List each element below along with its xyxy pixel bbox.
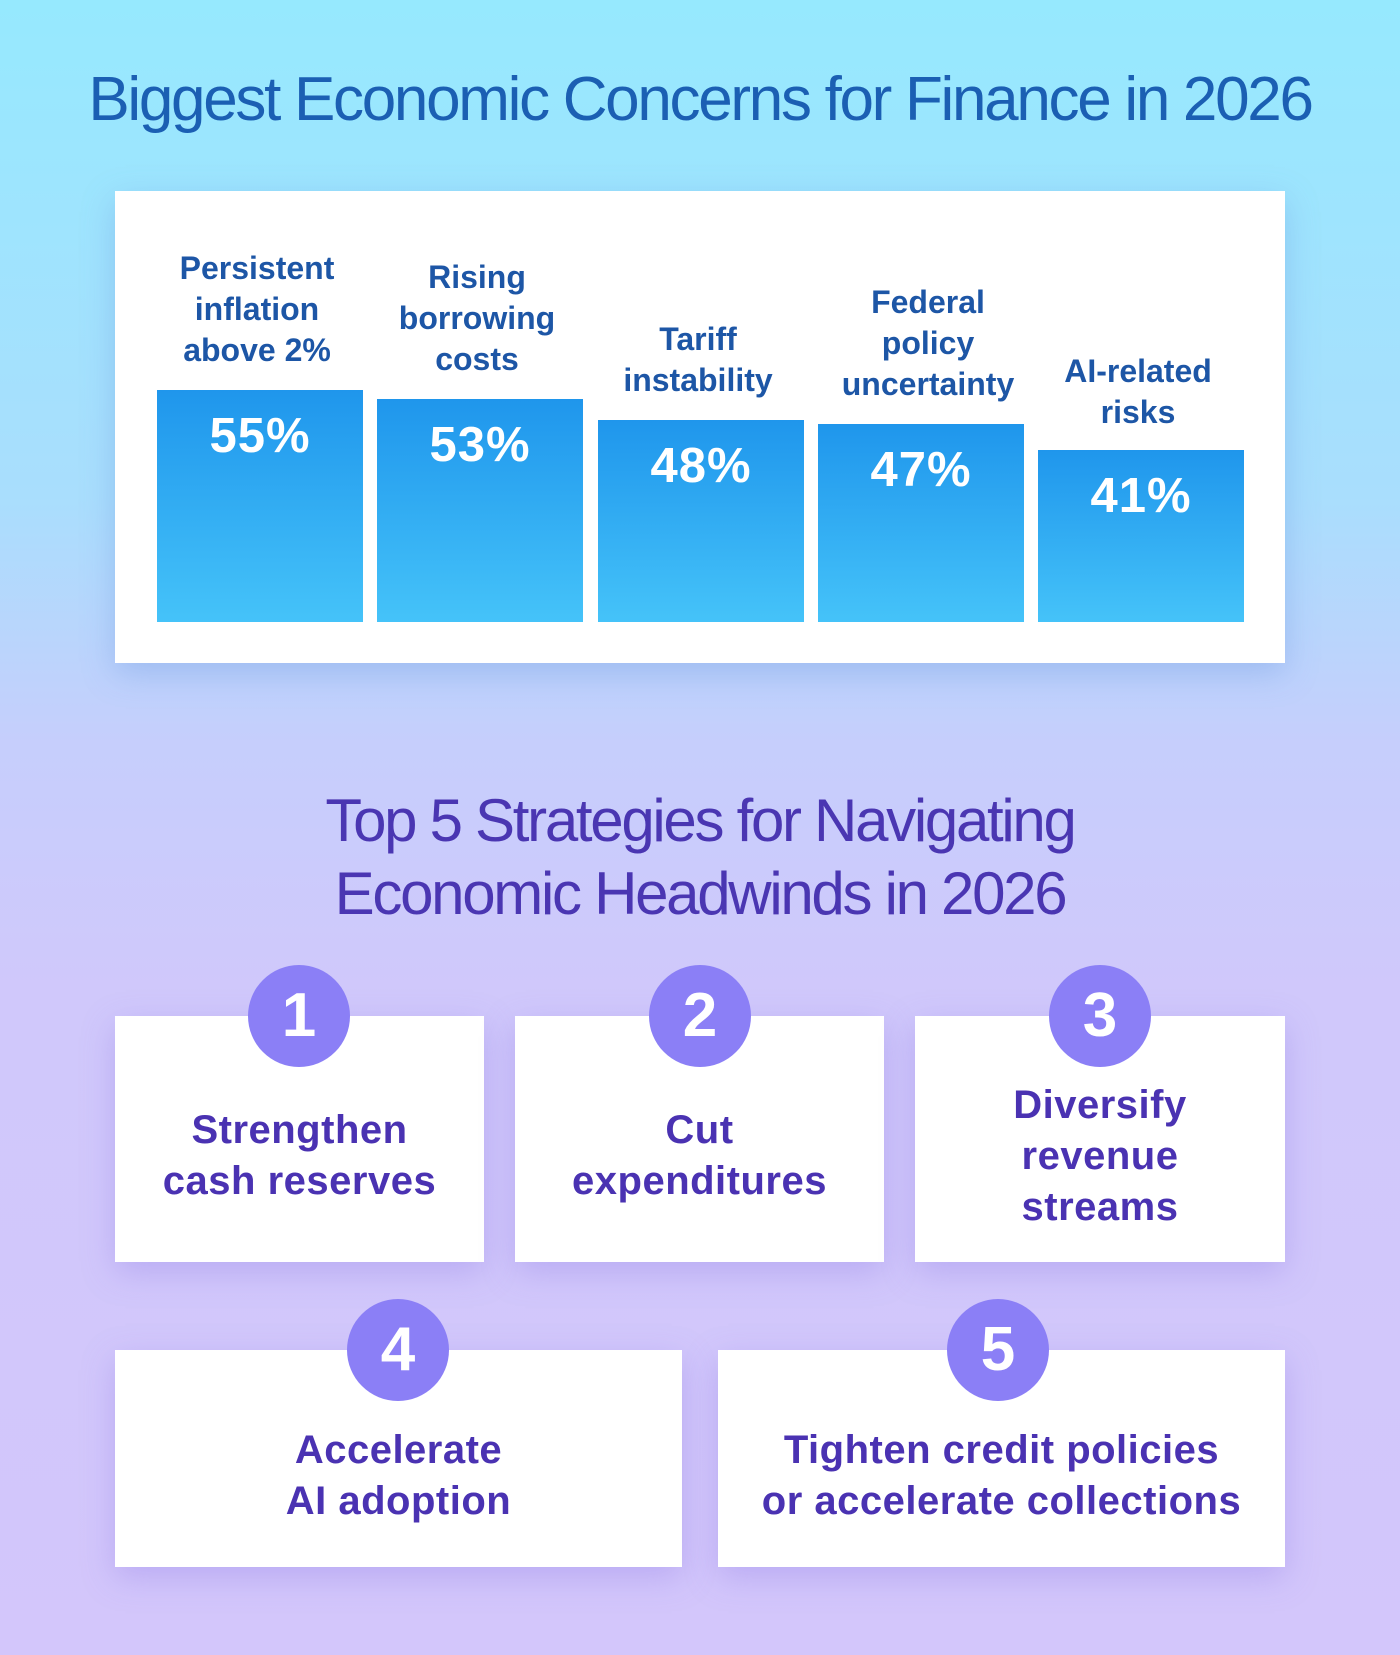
bar 3 bbox=[598, 420, 804, 622]
bar 4 bbox=[818, 424, 1024, 622]
card 3: Diversify bbox=[1013, 1082, 1187, 1126]
card 3: streams bbox=[1022, 1184, 1178, 1228]
icon: number 4 bbox=[347, 1299, 449, 1401]
icon: number 5 bbox=[947, 1299, 1049, 1401]
card 4 bbox=[115, 1350, 682, 1567]
card 4: Accelerate bbox=[295, 1428, 502, 1472]
card 3: revenue bbox=[1022, 1134, 1178, 1178]
card 2: expenditures bbox=[572, 1159, 827, 1203]
bar 4: 47% bbox=[870, 443, 972, 497]
card 4: AI adoption bbox=[286, 1478, 511, 1522]
card 3 bbox=[915, 1016, 1285, 1262]
icon: number 5: 5 bbox=[981, 1315, 1015, 1384]
label 1: Persistent inflation above 2% bbox=[180, 250, 334, 368]
panel: bar chart bbox=[115, 191, 1285, 663]
subtitle: Economic Headwinds in 2026 bbox=[335, 860, 1065, 927]
bar 5 bbox=[1038, 450, 1244, 622]
card 1: Strengthen bbox=[191, 1108, 408, 1152]
label 2: Rising borrowing costs bbox=[399, 259, 555, 377]
bar 2: 53% bbox=[429, 418, 531, 472]
icon: number 4: 4 bbox=[381, 1315, 415, 1384]
card 2 bbox=[515, 1016, 884, 1262]
bar 1 bbox=[157, 390, 363, 622]
card 2: Cut bbox=[665, 1108, 734, 1152]
bar 3: 48% bbox=[650, 439, 752, 493]
card 5: Tighten credit policies bbox=[784, 1428, 1219, 1472]
bar 1: 55% bbox=[209, 409, 311, 463]
icon: number 2 bbox=[649, 965, 751, 1067]
icon: number 3 bbox=[1049, 965, 1151, 1067]
bar 2 bbox=[377, 399, 583, 622]
icon: number 3: 3 bbox=[1083, 981, 1117, 1050]
card 1 bbox=[115, 1016, 484, 1262]
icon: number 1: 1 bbox=[282, 981, 316, 1050]
icon: number 1 bbox=[248, 965, 350, 1067]
subtitle bbox=[325, 787, 1075, 927]
label 3: Tariff instability bbox=[623, 321, 773, 398]
bar 5: 41% bbox=[1090, 469, 1192, 523]
icon: number 2: 2 bbox=[683, 981, 717, 1050]
card 5: or accelerate collections bbox=[762, 1478, 1241, 1522]
title: Biggest Economic Concerns for Finance in 2026 bbox=[88, 65, 1312, 134]
card 1: cash reserves bbox=[163, 1159, 436, 1203]
label 4: Federal policy uncertainty bbox=[842, 284, 1014, 402]
subtitle: Top 5 Strategies for Navigating bbox=[325, 787, 1075, 854]
card 5 bbox=[718, 1350, 1285, 1567]
label 5: AI-related risks bbox=[1064, 353, 1212, 430]
